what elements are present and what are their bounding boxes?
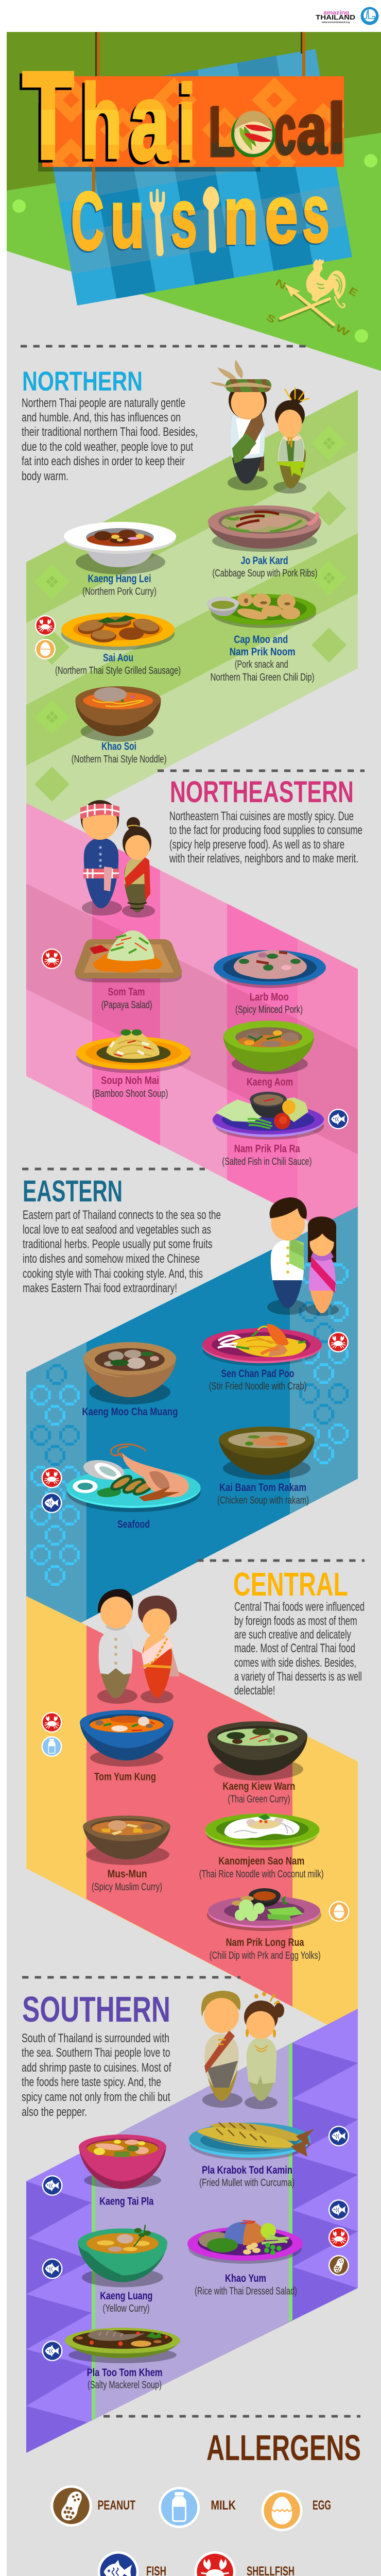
text: northern description: their traditional northern Thai food. Besides, (22, 425, 198, 439)
logo text: Thailand: THAILAND (316, 13, 355, 21)
panel: allergens legend (50, 2428, 361, 2576)
text: eastern description: traditional herbs. People usually put some fruits (23, 1238, 213, 1251)
figure: southern man (201, 1991, 243, 2108)
icon: milk (159, 2487, 200, 2528)
icon: fish allergen (41, 1493, 62, 1513)
blue checked cloth (41, 49, 352, 306)
label: Khao Yum (195, 2273, 297, 2297)
name: Kanomjeen Sao Nam (218, 1855, 304, 1867)
dish: Nam Prik Long Rua (207, 1888, 321, 1931)
description: (Northern Thai Style Grilled Sausage) (55, 665, 181, 676)
dish: Kaeng Luang (78, 2225, 167, 2287)
text: southern description: also the pepper. (22, 2105, 87, 2119)
text: central description (234, 1600, 365, 1698)
dish: Som Tam (75, 930, 182, 982)
title word: Cuisines: u (110, 173, 145, 265)
logo text: url: www.tourismthailand.org (321, 21, 350, 24)
description: (Papaya Salad) (101, 999, 152, 1011)
dish: Khao Soi (75, 686, 161, 742)
text: southern description: the sea. Southern Thai people love to (22, 2046, 170, 2060)
text: northern description: and humble. And, this has influences on (22, 411, 181, 425)
label: Kaeng Hang Lei (82, 573, 157, 598)
name: Khao Soi (101, 741, 136, 752)
title word: Cuisines: s (171, 172, 197, 264)
description: (Chicken Soup with rakam) (217, 1495, 309, 1506)
dish: Cap Moo and Nam Prik Noom (207, 593, 316, 628)
description: (Northern Pork Curry) (82, 586, 157, 598)
description: (Rice with Thai Dressed Salad) (195, 2285, 297, 2297)
text: central description: delectable! (234, 1684, 275, 1698)
name: Sen Chan Pad Poo (221, 1368, 295, 1380)
panel: northeastern (26, 775, 362, 1247)
label: Sen Chan Pad Poo (209, 1368, 307, 1392)
icon: fish allergen (42, 2175, 63, 2196)
dish: Soup Noh Mai (76, 1029, 190, 1073)
description: (Chili Dip with Prk and Egg Yolks) (210, 1950, 321, 1961)
dish: Pla Krabok Tod Kamin (189, 2123, 314, 2160)
description: (Thai Green Curry) (228, 1794, 290, 1805)
icon: fish allergen (328, 2126, 349, 2146)
figure: central man (97, 1589, 137, 1704)
description: (Spicy Minced Pork) (235, 1004, 303, 1015)
rope lower (92, 167, 95, 201)
label: Khao Soi (72, 741, 167, 765)
text: northern description: body warm. (22, 469, 68, 483)
pixel diamond pattern (30, 1263, 349, 1586)
title word: Local: l (328, 89, 346, 168)
figure: southern woman (244, 1992, 284, 2109)
text: southern description (22, 2031, 171, 2119)
weathervane (265, 259, 360, 339)
description: (Stir Fried Noodle with Crab) (209, 1381, 307, 1392)
compass E: E (347, 285, 360, 299)
label: milk: MILK (211, 2498, 236, 2513)
dish: Kaeng Moo Cha Muang (83, 1342, 176, 1404)
logo text: amazing: amazing (323, 10, 349, 16)
dish: Tom Yum Kung (80, 1710, 174, 1767)
figure: northern man (210, 360, 271, 490)
description: (Salted Fish in Chili Sauce) (222, 1156, 311, 1167)
legend: milk (159, 2487, 236, 2528)
icon: shellfish (195, 2551, 236, 2576)
label: Kaeng Moo Cha Muang: Kaeng Moo Cha Muang (82, 1406, 178, 1418)
icon: fish (98, 2551, 139, 2576)
title word: Cuisines: n (223, 169, 258, 261)
text: southern description: spicy came not only from the chili but (22, 2090, 170, 2104)
dish: Kanomjeen Sao Nam (205, 1814, 319, 1850)
figure: northern woman (273, 387, 309, 494)
figure: central woman (138, 1596, 180, 1703)
heading: northern: NORTHERN (22, 366, 143, 397)
icon: egg (262, 2490, 303, 2531)
label: Tom Yum Kung: Tom Yum Kung (94, 1771, 156, 1783)
label: Sai Aou (55, 652, 181, 676)
blue bands (26, 1207, 358, 1651)
icon: fish allergen (328, 1109, 349, 1129)
icon: fork (150, 189, 165, 256)
name: Nam Prik Long Rua (226, 1937, 304, 1948)
orange banner (42, 76, 344, 167)
green diagonal bands (26, 389, 358, 840)
label: Seafood: Seafood (117, 1519, 150, 1530)
dish: Pla Too Tom Khem (65, 2328, 180, 2363)
icon: shellfish allergen (41, 1712, 62, 1733)
text: southern description: South of Thailand is surrounded with (22, 2031, 169, 2045)
dish: Sen Chan Pad Poo (202, 1324, 322, 1366)
rope upper right (301, 32, 305, 78)
name: Nam Prik Pla Ra (234, 1143, 300, 1155)
dish: Kaeng Aom (223, 1021, 314, 1074)
figure: eastern woman (306, 1216, 339, 1316)
label: Kaeng Tai Pla: Kaeng Tai Pla (99, 2196, 154, 2207)
name: Kaeng Luang (100, 2290, 152, 2302)
legend: peanut (50, 2485, 135, 2527)
dish: Kaeng Hang Lei (64, 522, 176, 574)
name: Sai Aou (103, 652, 133, 664)
text: eastern description: into dishes and somehow mixed the Chinese (23, 1252, 200, 1266)
icon: spoon (203, 187, 219, 253)
name line 2: Nam Prik Noom (230, 646, 296, 658)
heading: eastern: EASTERN (23, 1175, 123, 1208)
label: Soup Noh Mai (93, 1075, 168, 1099)
legend: shellfish (195, 2551, 295, 2576)
icon: fish allergen (42, 2341, 63, 2361)
title word: Cuisines: s (302, 167, 330, 259)
dish: Khao Yum (187, 2221, 303, 2264)
title word: Local: a (298, 89, 328, 168)
legend: egg (262, 2490, 331, 2531)
text: southern description: add shrimp paste to cuisines. Most of (22, 2061, 171, 2075)
name: Soup Noh Mai (101, 1075, 159, 1087)
label: Mus-Mun (92, 1868, 162, 1893)
label: Som Tam (101, 986, 152, 1011)
dish: Nam Prik Pla Ra (213, 1092, 324, 1140)
text: eastern description: makes Eastern Thai food extraordinary! (23, 1281, 177, 1295)
logos: Amazing Thailand and TAT seal (316, 7, 379, 25)
name: Larb Moo (250, 991, 289, 1003)
compass S: S (265, 312, 278, 326)
dish: Kai Baan Tom Rakam (219, 1427, 315, 1480)
dish: Seafood (67, 1444, 201, 1512)
label: Nam Prik Pla Ra (222, 1143, 311, 1167)
name: Pla Krabok Tod Kamin (202, 2164, 292, 2176)
description: (Bamboo Shoot Soup) (93, 1088, 168, 1099)
text: northern description: Northern Thai people are naturally gentle (22, 396, 185, 410)
name: Mus-Mun (108, 1868, 147, 1880)
name: Jo Pak Kard (241, 555, 288, 567)
dish: Larb Moo (214, 950, 326, 988)
icon: seal (360, 7, 379, 25)
purple triangle bands (26, 2009, 358, 2453)
icon: shellfish allergen (41, 1467, 62, 1488)
dark green background (7, 32, 381, 191)
title word: Thai: a (130, 60, 171, 183)
label: Kaeng Aom: Kaeng Aom (247, 1076, 293, 1088)
description: (Spicy Muslim Curry) (92, 1882, 162, 1893)
compass N: N (273, 277, 288, 292)
text: northern description: due to the cold weather, people love to put (22, 440, 193, 454)
icon: peanut (50, 2485, 92, 2527)
description: (Cabbage Soup with Pork Ribs) (212, 568, 317, 579)
label: Cap Moo and Nam Prik Noom (211, 634, 315, 683)
banner shadow (38, 103, 261, 172)
dish: Jo Pak Kard (208, 505, 321, 552)
title word: Thai: i (178, 63, 196, 181)
compass W: W (334, 323, 352, 339)
label: Pla Krabok Tod Kamin (199, 2164, 295, 2189)
title word: Cuisines: i (152, 172, 162, 264)
name: Pla Too Tom Khem (87, 2367, 163, 2379)
dish: Mus-Mun (83, 1816, 170, 1865)
figure: eastern man (267, 1197, 307, 1315)
title word: Cuisines: C (71, 175, 104, 267)
name: Kaeng Kiew Warn (222, 1781, 295, 1792)
text: eastern description: Eastern part of Thailand connects to the sea so the (23, 1208, 221, 1222)
banner diamonds (50, 77, 344, 167)
label: Pla Too Tom Khem (87, 2367, 163, 2391)
name line 1: Cap Moo and (234, 634, 288, 646)
name: Kaeng Hang Lei (88, 573, 151, 585)
figure: northeastern man (80, 800, 122, 916)
name: Som Tam (108, 986, 145, 998)
green dots (12, 154, 377, 343)
label: peanut: PEANUT (98, 2498, 135, 2513)
title word: Thai: h (81, 63, 123, 180)
title word: Cuisines: i (206, 170, 215, 262)
legend: fish (98, 2551, 166, 2576)
text: eastern description: cooking style with Thai cooking style. And, this (23, 1267, 203, 1281)
label: Larb Moo (235, 991, 303, 1015)
description: (Thai Rice Noodle with Coconut milk) (199, 1869, 324, 1880)
panel: central (26, 1566, 365, 2041)
dish: Sai Aou (61, 613, 175, 650)
icon: egg allergen (328, 1901, 349, 1922)
label: Kai Baan Tom Rakam (217, 1482, 309, 1506)
panel: title header (7, 32, 381, 371)
panel: southern (22, 1989, 358, 2453)
label: Nam Prik Long Rua (210, 1937, 321, 1961)
icon: shellfish allergen (35, 615, 56, 636)
text: northeastern description (169, 809, 362, 866)
icon: shellfish allergen (41, 948, 62, 969)
icon: fish allergen (328, 2199, 349, 2220)
heading: southern: SOUTHERN (22, 1989, 170, 2029)
description line 2: Northern Thai Green Chili Dip) (211, 672, 315, 683)
title word: Thai: T (22, 45, 74, 185)
label: Jo Pak Kard (212, 555, 317, 579)
label: Kaeng Luang (100, 2290, 152, 2314)
name: Khao Yum (225, 2273, 266, 2284)
name: Kai Baan Tom Rakam (219, 1482, 306, 1494)
band diamonds (34, 426, 347, 802)
title word: Local: o (236, 91, 267, 170)
label: Kanomjeen Sao Nam (199, 1855, 324, 1880)
description: (Salty Mackerel Soup) (88, 2380, 162, 2391)
icon: shellfish allergen (328, 2227, 349, 2248)
text: northern description: fat into each dishes in order to keep their (22, 454, 185, 468)
label: Kaeng Kiew Warn (222, 1781, 295, 1805)
light green background (7, 133, 381, 371)
panel: eastern (23, 1175, 358, 1651)
label: egg: EGG (313, 2498, 331, 2513)
dish: Kaeng Tai Pla (79, 2134, 166, 2189)
text: eastern description: local love to eat seafood and vegetables such as (23, 1223, 211, 1237)
figure: northeastern woman (122, 817, 155, 918)
text: southern description: the foods here taste spicy. And, the (22, 2075, 161, 2089)
title word: Local: c (275, 90, 297, 169)
icon: egg allergen (35, 639, 56, 659)
icon: milk allergen (41, 1736, 62, 1757)
description line 1: (Pork snack and (235, 659, 288, 670)
description: (Yellow Curry) (103, 2303, 149, 2314)
yellow and coral bands (26, 1596, 358, 2041)
icon: fish allergen (42, 2259, 63, 2279)
title word: Local: L (210, 92, 235, 171)
icon: shellfish allergen (328, 1332, 349, 1352)
pink bands (26, 803, 358, 1247)
dish: Kaeng Kiew Warn (207, 1721, 307, 1781)
text: eastern description (23, 1208, 221, 1295)
rope upper left (95, 32, 100, 78)
icon: peanut allergen (328, 2255, 349, 2276)
description: (Nothern Thai Style Noddle) (72, 754, 167, 765)
panel: northern (22, 360, 358, 840)
description: (Fried Mullet with Curcuma) (199, 2177, 295, 2189)
plate with chili (231, 111, 275, 157)
text: northern description (22, 396, 198, 483)
title word: Cuisines: e (265, 168, 298, 260)
